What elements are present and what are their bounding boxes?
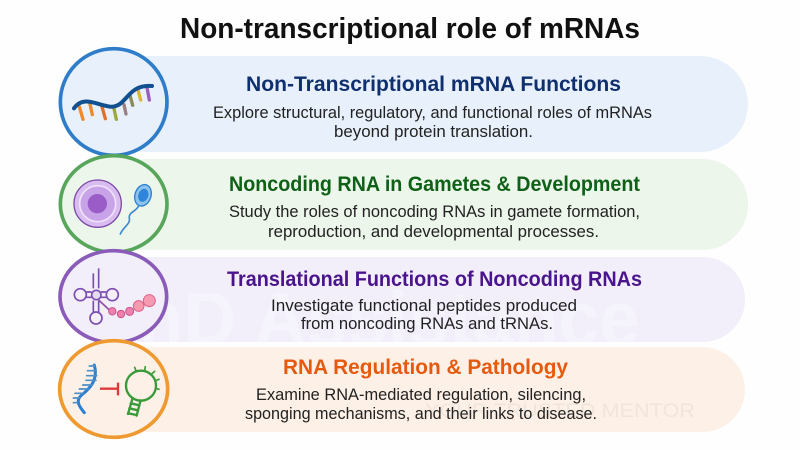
description: panel 1: [213, 104, 652, 141]
heading: panel 1: Non-Transcriptional mRNA Functions: [246, 73, 621, 96]
description: panel 2: Study the roles of noncoding RNAs in gamete formation,: [229, 203, 640, 221]
description: panel 1: beyond protein translation.: [334, 123, 533, 141]
icon part: blue RNA strand: [73, 365, 97, 413]
icon: mRNA strand in blue circle: [60, 49, 167, 155]
icon part: green hairpin: [126, 367, 159, 416]
heading: panel 2: Noncoding RNA in Gametes & Development: [229, 173, 640, 196]
heading: panel 3: Translational Functions of Noncoding RNAs: [227, 268, 642, 291]
description: panel 3: Investigate functional peptides produced: [271, 297, 577, 315]
title: Non-transcriptional role of mRNAs: [180, 13, 640, 45]
description: panel 4: [245, 386, 597, 423]
description: panel 4: Examine RNA-mediated regulation, silencing,: [256, 386, 586, 404]
panel: RNA regulation and pathology: [100, 347, 745, 432]
watermark: brand name on panel: PhD Assistance: [90, 277, 640, 362]
description: panel 1: Explore structural, regulatory, and functional roles of mRNAs: [213, 104, 652, 122]
description: panel 3: from noncoding RNAs and tRNAs.: [301, 315, 553, 333]
watermark: tagline on panel: YOUR TRUSTED MENTOR: [425, 401, 695, 422]
description: panel 4: sponging mechanisms, and their links to disease.: [245, 405, 597, 423]
icon part: red inhibition bar: [100, 383, 118, 395]
heading: panel 4: RNA Regulation & Pathology: [283, 356, 568, 379]
icon: tRNA and peptide in purple circle: [60, 251, 167, 343]
panel: translational functions of noncoding RNAs: [90, 257, 745, 362]
icon: egg and sperm in green circle: [60, 156, 167, 252]
description: panel 2: reproduction, and developmental processes.: [268, 223, 599, 241]
panel: non-transcriptional mRNA functions: [100, 56, 748, 152]
description: panel 3: [271, 297, 577, 333]
description: panel 2: [229, 203, 640, 241]
icon: RNA inhibiting hairpin in orange circle: [60, 341, 168, 437]
panel: noncoding RNA in gametes and development: [100, 159, 748, 250]
